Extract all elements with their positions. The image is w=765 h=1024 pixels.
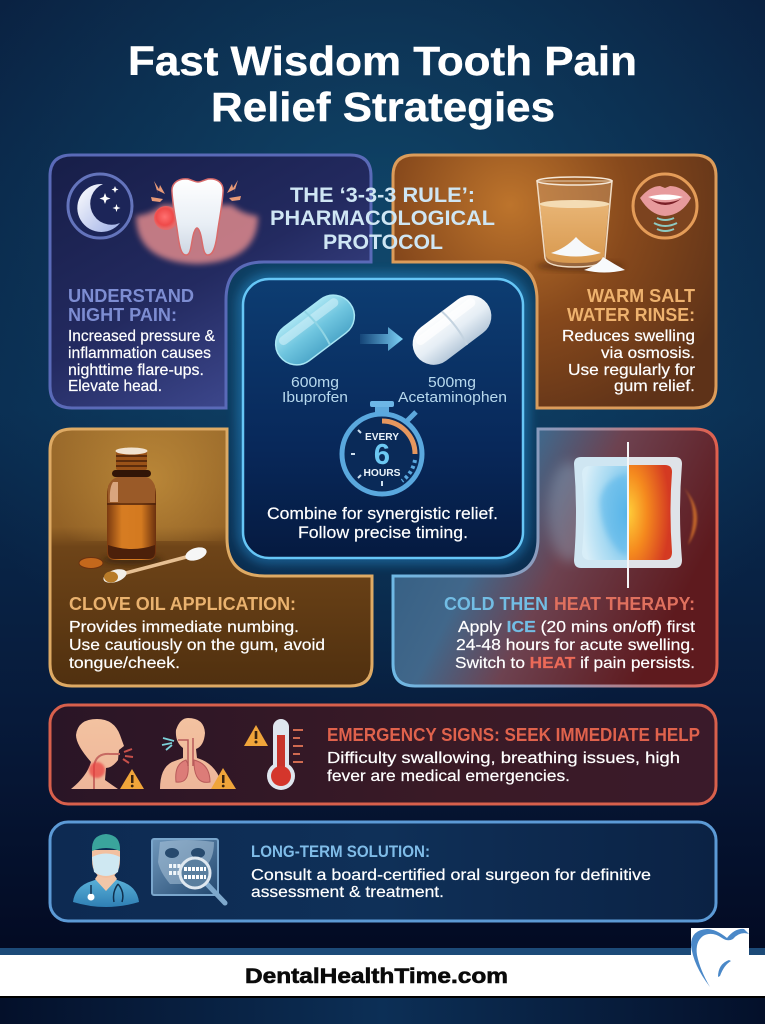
icon: glass of salt water: [536, 177, 625, 272]
footer url: DentalHealthTime.com: [245, 965, 508, 988]
label: 500mg acetaminophen: 500mg: [428, 374, 476, 391]
heading: warm salt water rinse: [567, 286, 695, 325]
heading: understand night pain: UNDERSTAND: [68, 286, 194, 306]
text: night pain body: nighttime flare-ups.: [68, 362, 204, 379]
heading: the 3-3-3 rule: [270, 184, 495, 254]
title: [128, 38, 637, 130]
heading: warm salt water rinse: WATER RINSE:: [567, 305, 695, 325]
text: combine for synergistic relief: Combine for synergistic relief.: [267, 504, 498, 523]
text: clove oil body: [69, 619, 325, 672]
text: long-term body: [251, 867, 651, 901]
panel: cold then heat therapy: [393, 429, 717, 686]
text: salt rinse body: [562, 328, 696, 395]
heading: cold then heat therapy: COLD THEN: [444, 594, 548, 614]
heading: cold then heat therapy: [444, 594, 695, 614]
text: cold then heat body: 24-48 hours for acute swelling.: [456, 637, 695, 654]
icon: stopwatch every 6 hours: 6: [374, 439, 390, 471]
heading: understand night pain: [68, 286, 194, 325]
text: cold then heat body: Apply ICE (20 mins on/off) first: [458, 619, 696, 636]
logo: tooth outline: [691, 928, 749, 987]
icon: clove oil bottle: [79, 448, 208, 585]
text: night pain body: [68, 328, 215, 395]
icon: ibuprofen capsule: [267, 287, 363, 373]
label: 600mg ibuprofen: Ibuprofen: [282, 389, 348, 406]
text: night pain body: inflammation causes: [68, 345, 211, 362]
panel: long-term solution: [50, 822, 716, 921]
heading: cold then heat therapy: HEAT THERAPY:: [554, 594, 695, 614]
heading: emergency signs: EMERGENCY SIGNS: SEEK IMMEDIATE HELP: [327, 725, 700, 745]
text: emergency body: fever are medical emergencies.: [327, 768, 570, 785]
text: combine for synergistic relief: Follow precise timing.: [298, 523, 468, 542]
arrow: ibuprofen to acetaminophen: [360, 327, 403, 351]
label: 500mg acetaminophen: Acetaminophen: [398, 389, 507, 406]
text: cold then heat body: [455, 619, 696, 672]
heading: the 3-3-3 rule: THE ‘3-3-3 RULE’:: [290, 184, 475, 207]
panel: pharmacological protocol: [243, 279, 523, 558]
heading: the 3-3-3 rule: PHARMACOLOGICAL: [270, 207, 495, 230]
icon: lungs breathing issues: [160, 718, 236, 789]
icon: aching tooth with inflamed gum: [136, 179, 258, 264]
icon: moon and stars: [68, 174, 132, 238]
text: long-term body: Consult a board-certified oral surgeon for definitive: [251, 867, 651, 884]
text: salt rinse body: via osmosis.: [601, 345, 695, 362]
heading: the 3-3-3 rule: PROTOCOL: [323, 231, 443, 254]
icon: oral surgeon: [73, 834, 139, 907]
heading: clove oil application: CLOVE OIL APPLICATION:: [69, 594, 296, 614]
text: clove oil body: tongue/cheek.: [69, 655, 180, 672]
heading: warm salt water rinse: WARM SALT: [587, 286, 695, 306]
icon: stopwatch every 6 hours: EVERY: [365, 431, 399, 443]
heading: long-term solution: LONG-TERM SOLUTION:: [251, 842, 430, 861]
label: 600mg ibuprofen: 600mg: [291, 374, 339, 391]
panel: warm salt water rinse: [393, 155, 716, 408]
title: Relief Strategies: [211, 84, 555, 130]
icon: acetaminophen capsule: [404, 287, 500, 373]
text: combine for synergistic relief: [267, 504, 498, 542]
text: night pain body: Increased pressure &: [68, 328, 215, 345]
title: Fast Wisdom Tooth Pain: [128, 38, 637, 84]
icon: mouth rinsing: [633, 174, 697, 238]
icon: dental x-ray with magnifier: [152, 839, 225, 903]
text: emergency body: Difficulty swallowing, breathing issues, high: [327, 750, 680, 767]
icon: half ice half heat pack: [548, 442, 697, 588]
icon: throat swelling: [71, 719, 144, 789]
icon: stopwatch every 6 hours: [342, 401, 422, 494]
icon: warning sign: [244, 725, 268, 746]
panel: understand night pain: [50, 155, 371, 408]
icon: stopwatch every 6 hours: HOURS: [364, 467, 400, 479]
text: long-term body: assessment & treatment.: [251, 884, 444, 901]
label: 500mg acetaminophen: [398, 374, 507, 406]
text: emergency body: [327, 750, 680, 785]
text: salt rinse body: Use regularly for: [568, 362, 696, 379]
text: night pain body: Elevate head.: [68, 378, 162, 395]
footer band: [0, 948, 765, 1024]
text: salt rinse body: gum relief.: [614, 378, 695, 395]
text: clove oil body: Provides immediate numbing.: [69, 619, 299, 636]
text: clove oil body: Use cautiously on the gum, avoid: [69, 637, 325, 654]
panel: clove oil application: [50, 429, 372, 686]
text: cold then heat body: Switch to HEAT if pain persists.: [455, 655, 695, 672]
icon: thermometer: [267, 719, 303, 790]
heading: understand night pain: NIGHT PAIN:: [68, 305, 177, 325]
label: 600mg ibuprofen: [282, 374, 348, 406]
panel: emergency signs: [50, 705, 716, 804]
text: salt rinse body: Reduces swelling: [562, 328, 695, 345]
